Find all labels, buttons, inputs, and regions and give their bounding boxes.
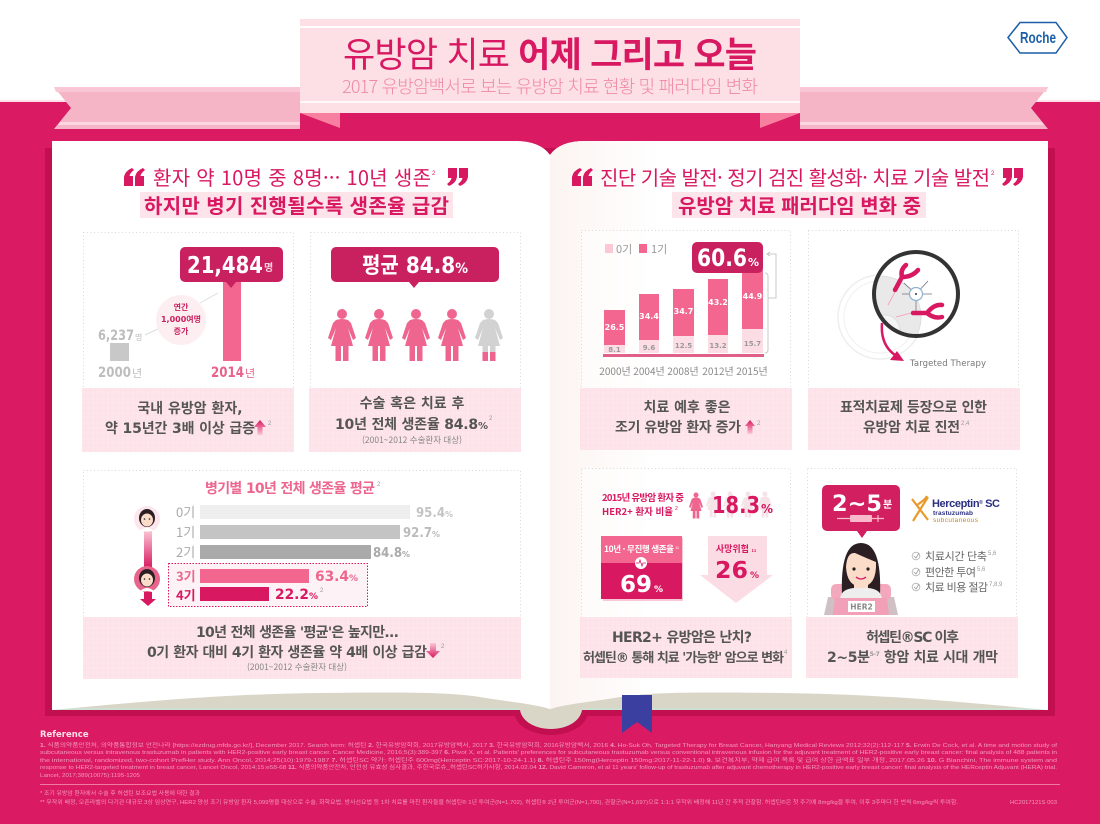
card: progression-free survival 69%: 11 bbox=[675, 545, 680, 550]
card: progression-free survival 69%: 10년 · 무진행 생존율 bbox=[604, 543, 674, 555]
document code: HC2017121S 003 bbox=[1010, 800, 1057, 806]
callout: 21,484: 명 bbox=[264, 259, 273, 274]
panel text: 2 bbox=[757, 421, 761, 427]
stat text: HER2 ratio: 2015년 유방암 환자 중 bbox=[602, 490, 684, 504]
panel text: 약 15년간 3배 이상 급증 bbox=[105, 421, 255, 437]
stat text: HER2 ratio bbox=[602, 490, 684, 518]
panel text: 2 bbox=[489, 416, 493, 422]
increase circle: 1,000여명 bbox=[161, 314, 201, 324]
open book bbox=[45, 141, 1055, 735]
panel text bbox=[335, 395, 493, 446]
reference block: Reference bbox=[40, 730, 89, 740]
logo: Herceptin SC: ® bbox=[979, 499, 983, 506]
panel text: 치료 예후 좋은 bbox=[643, 400, 731, 416]
increase circle bbox=[145, 293, 218, 345]
illustration: patient: HER2 bbox=[850, 602, 873, 612]
labels: bars bbox=[98, 328, 255, 381]
heading: right page: 진단 기술 발전· 정기 검진 활성화· 치료 기술 발전 bbox=[600, 162, 990, 191]
stacked bar chart: 43.2 bbox=[708, 298, 728, 307]
card: progression-free survival 69% bbox=[601, 536, 683, 601]
panel text: 2 bbox=[441, 644, 445, 650]
stat: 18.3%: % bbox=[761, 502, 773, 516]
stacked bar chart: 2000년 bbox=[599, 363, 631, 378]
callout: 2~5 minutes: 2~5 bbox=[832, 492, 882, 517]
benefits list: 치료 비용 절감 bbox=[925, 579, 988, 595]
heading: right page: 2 bbox=[991, 171, 995, 177]
bar: 2014 bbox=[223, 282, 241, 361]
logo: Roche bbox=[1008, 22, 1067, 53]
callout: average 84.8% bbox=[331, 247, 499, 288]
panel text: 허셉틴® 통해 치료 '가능한' 암으로 변화 bbox=[583, 650, 784, 666]
card: death risk 26% bbox=[700, 536, 773, 603]
bar chart: stages: % bbox=[309, 592, 318, 602]
logo: Herceptin SC: subcutaneous bbox=[933, 517, 979, 524]
card: death risk 26%: 26 bbox=[715, 558, 748, 584]
panel text: HER2+ 유방암은 난치? bbox=[612, 630, 752, 646]
logo: Herceptin SC: SC bbox=[982, 498, 1000, 510]
highlight box: stage 3 and 4 bbox=[168, 564, 368, 606]
labels: bars: 년 bbox=[245, 365, 255, 381]
panel: Herceptin SC bbox=[806, 468, 1018, 678]
stacked bar chart: 9.6 bbox=[643, 344, 655, 352]
increase circle: 증가 bbox=[174, 326, 189, 337]
ribbon: left tail bbox=[54, 87, 340, 129]
icon: stage progression arrow bbox=[140, 530, 156, 606]
legend bbox=[605, 241, 667, 257]
panel: survival by stage bbox=[83, 470, 521, 679]
panel: early stage increase bbox=[580, 230, 792, 450]
stat: 18.3%: 18.3 bbox=[712, 493, 760, 519]
stacked bar chart: 2012년 bbox=[702, 363, 734, 378]
icons: five women bbox=[328, 309, 503, 361]
logo: Herceptin SC: trastuzumab bbox=[933, 510, 973, 517]
title banner bbox=[300, 19, 800, 113]
benefits list: 편안한 투여 bbox=[925, 564, 976, 580]
stacked bar chart: 8.1 bbox=[608, 346, 621, 354]
logo: Herceptin SC: Herceptin bbox=[932, 498, 980, 510]
ribbon: right tail bbox=[760, 87, 1048, 129]
stat text: HER2 ratio: HER2+ 환자 비율 bbox=[602, 504, 673, 518]
panel text: 10년 전체 생존율 '평균'은 높지만... bbox=[196, 625, 399, 641]
panel text bbox=[827, 630, 998, 666]
panel text bbox=[583, 630, 788, 666]
panel text: 국내 유방암 환자, bbox=[137, 401, 243, 417]
stacked bar chart: 2015년 bbox=[736, 363, 768, 378]
panel text bbox=[147, 625, 445, 673]
footnotes: ** 무작위 배정, 오픈라벨의 다기관 대규모 3상 임상연구, HER2 양성 조기 유방암 환자 5,099명을 대상으로 수술, 화학요법, 방사선요법 등 1차 치료를 마친 환자들을 허셉틴® 1년 투여군(N=1,702), 허셉틴® 2년 투여군(N=1,700), 관찰군(N=1,697)으로 1:1:1 무작위 배정해 11년 간 추적 관찰함. 허셉틴®은 첫 주기에 8mg/kg을 투여, 이후 3주마다 한 번씩 6mg/kg씩 투여함. bbox=[40, 798, 958, 806]
bar chart: stages: 2기 bbox=[176, 542, 195, 561]
callout: 2~5 minutes bbox=[822, 485, 900, 538]
card: death risk 26%: % bbox=[750, 571, 759, 581]
bar chart: stages: 92.7 bbox=[403, 526, 432, 541]
bar chart: stages: 1기 bbox=[176, 522, 195, 541]
illustration: patient bbox=[824, 543, 898, 615]
bar: 2000 bbox=[110, 343, 129, 361]
labels: bars: 2000 bbox=[98, 365, 131, 381]
increase circle: 연간 bbox=[174, 302, 189, 313]
icons: women ratio bbox=[689, 492, 772, 518]
bar chart: stages: 2 bbox=[320, 588, 324, 594]
callout: 2~5 minutes: 분 bbox=[883, 496, 892, 511]
labels: bars: 명 bbox=[135, 332, 142, 343]
callout: average 84.8%: 평균 84.8% bbox=[362, 254, 468, 279]
panel: average survival bbox=[309, 232, 521, 452]
heading: right page bbox=[572, 162, 1023, 219]
bar chart: stages: 95.4 bbox=[416, 506, 445, 521]
panel text: 유방암 치료 진전 bbox=[863, 420, 960, 436]
heading: left page: 하지만 병기 진행될수록 생존율 급감 bbox=[144, 190, 449, 219]
heading: left page: 환자 약 10명 중 8명··· 10년 생존 bbox=[153, 162, 431, 191]
chart title: 2 bbox=[377, 482, 381, 488]
stacked bar chart: 15.7 bbox=[744, 340, 761, 348]
stat text: HER2 ratio: 2 bbox=[675, 506, 678, 512]
labels: bars: 년 bbox=[132, 365, 142, 381]
legend: 0기 bbox=[616, 241, 632, 257]
reference text: response to HER2-targeted treatment in breast cancer, Lancet Oncol, 2014;15:e58-68 11. 식품의약품안전처, 안전성 유효성 심사결과, 주한국로슈_허셉틴SC허가사항, 2014.02.04 12. David Cameron, et al 11 years' follow-up of trastuzumab after adjuvant chemotherapy in HER2-positive early breast cancer: final analysis of the HERceptin Adjuvant (HERA) trial. bbox=[40, 763, 1058, 771]
bar chart: stages: 4기 bbox=[176, 585, 196, 604]
bar chart: stages: 63.4 bbox=[315, 569, 349, 585]
heading: left page bbox=[124, 162, 468, 219]
labels: bars: 6,237 bbox=[98, 328, 134, 344]
bar chart: stages bbox=[176, 502, 453, 604]
bookmark bbox=[622, 695, 652, 733]
illustration: targeted therapy lens bbox=[838, 252, 958, 361]
stacked bar chart: 34.4 bbox=[639, 312, 659, 321]
stacked bar chart: 26.5 bbox=[605, 323, 625, 332]
logo: Herceptin SC bbox=[912, 496, 1000, 524]
logo: Roche: Roche bbox=[1020, 30, 1056, 47]
panel: targeted therapy bbox=[808, 230, 1020, 450]
bar chart: stages: 0기 bbox=[176, 502, 195, 521]
panel text: 항암 치료 시대 개막 bbox=[879, 650, 998, 666]
panel text bbox=[840, 400, 987, 436]
stacked bar chart: 13.2 bbox=[709, 342, 727, 350]
stacked bar chart: 44.9 bbox=[743, 292, 763, 301]
stacked bar chart: 2008년 bbox=[667, 363, 699, 378]
panel text: 2 bbox=[268, 421, 272, 427]
panel text: 4 bbox=[784, 650, 788, 656]
panel text bbox=[615, 400, 761, 436]
benefits list: 5,6 bbox=[988, 551, 997, 557]
panel text: 표적치료제 등장으로 인한 bbox=[840, 400, 987, 416]
labels: bars: 2014 bbox=[211, 365, 244, 381]
footnotes bbox=[40, 789, 958, 806]
benefits list: 치료시간 단축 bbox=[925, 548, 987, 564]
panel: HER2+ bbox=[580, 468, 792, 678]
panel text: (2001~2012 수술환자 대상) bbox=[362, 434, 462, 446]
bar chart: stages: % bbox=[402, 550, 410, 559]
bar chart: stages: % bbox=[349, 574, 358, 584]
icon: worried patient bbox=[134, 566, 160, 592]
benefits list: 7,8,9 bbox=[989, 582, 1003, 588]
bar chart: stages: 3기 bbox=[176, 566, 196, 585]
label: targeted therapy: Targeted Therapy bbox=[909, 359, 986, 369]
panel text bbox=[105, 401, 272, 437]
chart title: 병기별 10년 전체 생존율 평균 bbox=[205, 481, 375, 497]
reference text: Lancet, 2017;389(10075):1195-1205 bbox=[40, 773, 140, 779]
panel text: 수술 혹은 치료 후 bbox=[360, 395, 465, 412]
panel text: 조기 유방암 환자 증가 bbox=[615, 420, 741, 436]
stacked bar chart: 2004년 bbox=[633, 363, 665, 378]
panel text: (2001~2012 수술환자 대상) bbox=[247, 661, 347, 673]
stacked bar chart: 34.7 bbox=[674, 307, 693, 316]
callout: 60.6%: % bbox=[748, 256, 759, 269]
card: death risk 26%: 사망위험 11 bbox=[716, 542, 757, 555]
benefits list: 5,6 bbox=[977, 567, 986, 573]
benefits list bbox=[912, 548, 1003, 595]
callout: 21,484 bbox=[180, 247, 283, 288]
card: progression-free survival 69%: 69 bbox=[620, 572, 652, 598]
icon: smiling patient bbox=[134, 506, 160, 532]
panel: patient increase bbox=[82, 232, 294, 452]
reference block bbox=[40, 730, 1060, 806]
reference text bbox=[40, 741, 1058, 779]
panel text: 5-7 bbox=[870, 651, 880, 658]
stacked bar chart bbox=[599, 270, 768, 378]
reference text: 1. 식품의약품안전처, 의약품통합정보 안전나라 [https://ezdrug.mfds.go.kr/], December 2017. Search term: 허셉틴 2. 한국유방암학회, 2017유방암백서, 2017 3. 한국유방암학회, 2016유방암백서, 2016 4. Ho-Suk Oh, Targeted Therapy for Breast Cancer, Hanyang Medical Reviews 2012;32(2):112-117 5. Erwin De Cock, et al. A time and motion study of bbox=[40, 741, 1058, 749]
reference text: subcutaneous versus intravenous trastuzumab in patients with HER2-positive early breast cancer. Cancer Medicine, 2016;5(3):389-397 6. Pivot X, et al. Patients' preferences for subcutaneous trastuzumab versus conventional intravenous infusion for the adjuvant treatment of HER2-positive early breast cancer: final analysis of 488 patients in bbox=[40, 750, 1057, 756]
reference text: the international, randomized, two-cohort PrefHer study. Ann Oncol, 2014;25(10):1979-1987 7. 허셉틴SC 약가: 허셉틴주 600mg(Herceptin SC:2017-10-24-1.1) 8. 허셉틴주 150mg(Herceptin 150mg:2017-11-22-1.0) 9. 보건복지부, 약제 급여 목록 및 급여 상한 금액표 일부 개정, 2017.05.26 10. G Bianchini, The immune system and bbox=[40, 756, 1057, 764]
bar chart: stages: 84.8 bbox=[373, 546, 402, 561]
footnotes: * 조기 유방암 환자에서 수술 후 허셉틴 보조요법 사용에 대한 결과 bbox=[40, 789, 200, 797]
callout: 21,484: 21,484 bbox=[187, 253, 263, 279]
card: progression-free survival 69%: % bbox=[654, 585, 663, 595]
callout: 60.6%: 60.6 bbox=[697, 244, 747, 272]
panel text: 허셉틴®SC 이후 bbox=[866, 630, 959, 646]
bar chart: stages: % bbox=[445, 510, 453, 519]
panel text: 10년 전체 생존율 84.8% bbox=[335, 417, 488, 433]
heading: left page: 2 bbox=[432, 171, 436, 177]
panel text: 0기 환자 대비 4기 환자 생존율 약 4배 이상 급감 bbox=[147, 645, 427, 661]
legend: 1기 bbox=[651, 241, 667, 257]
panel text: 2~5분 bbox=[827, 650, 870, 666]
bar chart: stages: 22.2 bbox=[275, 587, 309, 603]
stacked bar chart: 12.5 bbox=[675, 342, 692, 350]
bracket arrow bbox=[765, 252, 776, 353]
heading: right page: 유방암 치료 패러다임 변화 중 bbox=[678, 190, 921, 219]
subtitle: 2017 유방암백서로 보는 유방암 치료 현황 및 패러다임 변화 bbox=[342, 73, 758, 99]
title: 유방암 치료 어제 그리고 오늘 bbox=[343, 27, 757, 78]
panel text: 2,4 bbox=[961, 421, 970, 427]
bar chart: stages: % bbox=[432, 530, 440, 539]
